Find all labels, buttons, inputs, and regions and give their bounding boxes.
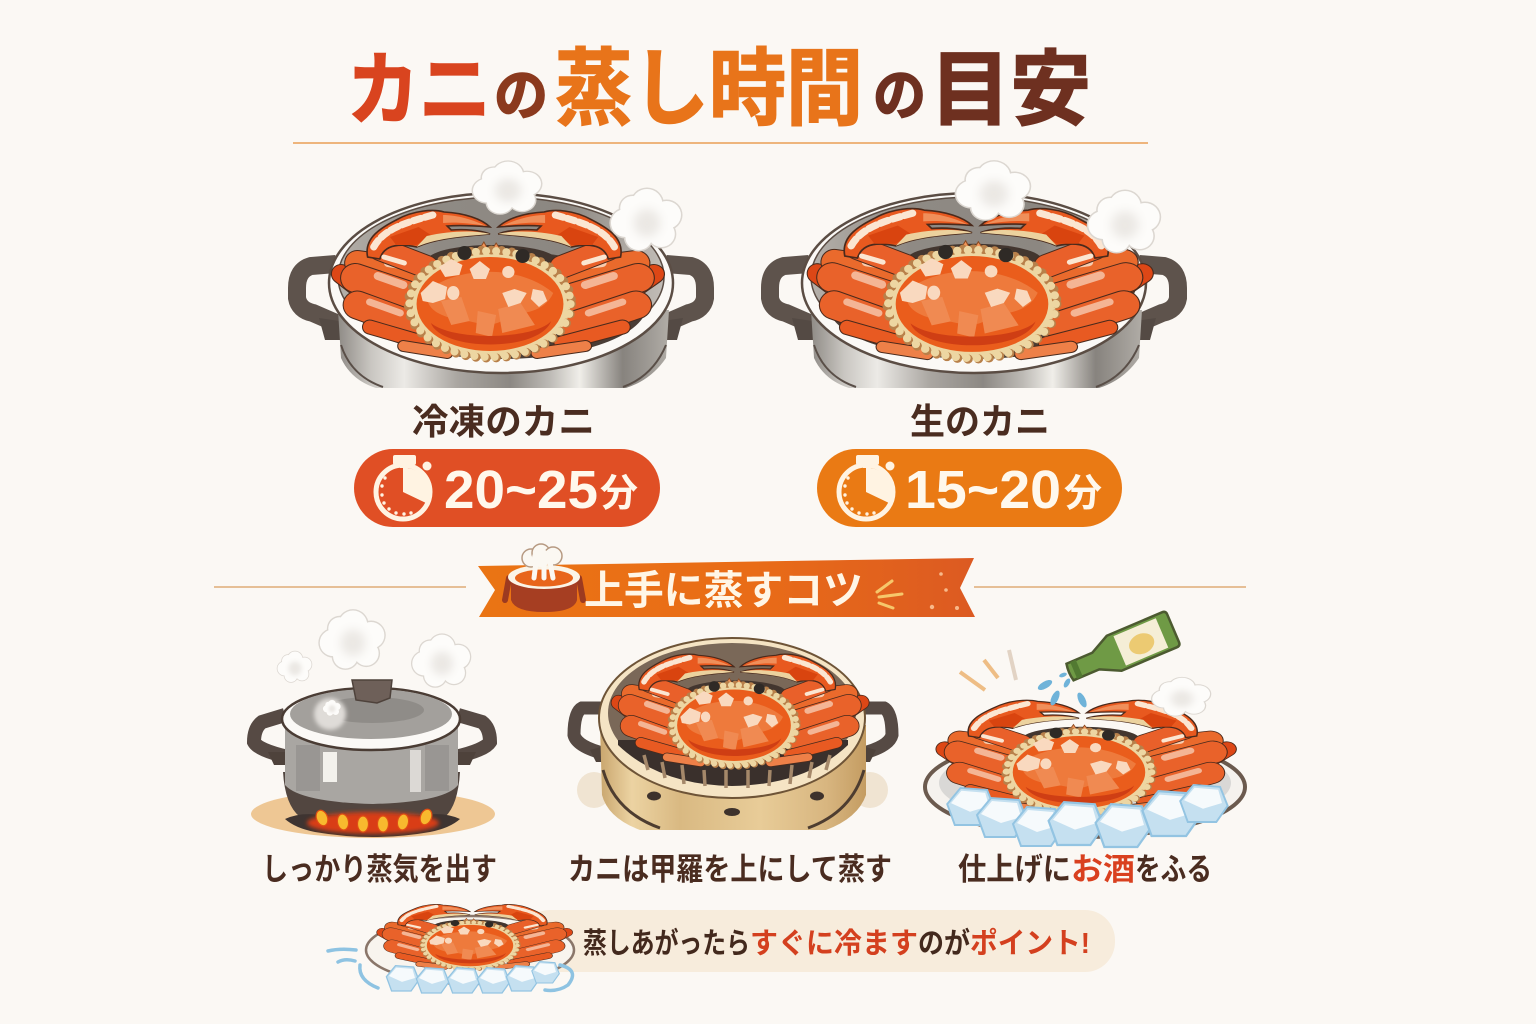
callout: cool immediately [328, 904, 1115, 993]
tip 2: steamer, shell up [568, 638, 892, 887]
label: fresh crab: 生のカニ [910, 401, 1050, 442]
title: の [494, 64, 548, 127]
caption [958, 852, 1212, 887]
illustration: crab on ice plate [925, 700, 1245, 847]
caption: カニは甲羅を上にして蒸す [568, 852, 892, 887]
icon: sake bottle [1062, 611, 1181, 690]
label: frozen crab: 冷凍のカニ [412, 401, 595, 442]
panel: frozen crab [297, 160, 705, 527]
title: の [873, 64, 926, 127]
title: 蒸し時間 [555, 42, 863, 136]
icon: sake droplets [1036, 672, 1089, 709]
illustration: frozen crab in pot [297, 160, 705, 388]
time pill: 20~25 minutes: 20~25 [444, 460, 598, 520]
tip 3: sprinkle sake [925, 611, 1245, 887]
title: 目安 [930, 45, 1091, 136]
illustration: crab on ice [328, 904, 574, 993]
icon: accent lines [960, 650, 1016, 690]
icon: pot with steam [505, 544, 583, 612]
panel: fresh crab [770, 160, 1178, 527]
time pill: 15~20 minutes: 15~20 [905, 460, 1061, 520]
callout text: すぐに冷ます [750, 927, 918, 960]
tip 1: steam pot [251, 609, 497, 887]
caption: をふる [1135, 852, 1212, 887]
title: カニ [347, 46, 491, 135]
icon: sparkle lines [877, 581, 902, 608]
illustration: fresh crab in pot [770, 160, 1178, 388]
time pill: 15~20 minutes: 分 [1064, 473, 1102, 515]
callout text: 蒸しあがったら [583, 926, 750, 960]
callout text: ポイント! [970, 927, 1090, 960]
title [347, 42, 1091, 136]
caption: しっかり蒸気を出す [262, 852, 497, 887]
callout text: のが [918, 926, 970, 960]
time pill: 15~20 minutes [817, 449, 1122, 527]
time pill: 20~25 minutes: 分 [600, 473, 638, 515]
illustration: bamboo steamer with crab [574, 638, 892, 830]
caption: 仕上げに [958, 852, 1071, 887]
time pill: 20~25 minutes [354, 449, 660, 527]
banner heading: 上手に蒸すコツ [584, 569, 863, 613]
steam cloud [1151, 677, 1211, 717]
callout text [583, 926, 1090, 960]
section banner: steaming tips [478, 544, 975, 617]
steam clouds [277, 609, 471, 688]
illustration: pot on burner [251, 680, 495, 838]
caption: お酒 [1071, 852, 1135, 887]
